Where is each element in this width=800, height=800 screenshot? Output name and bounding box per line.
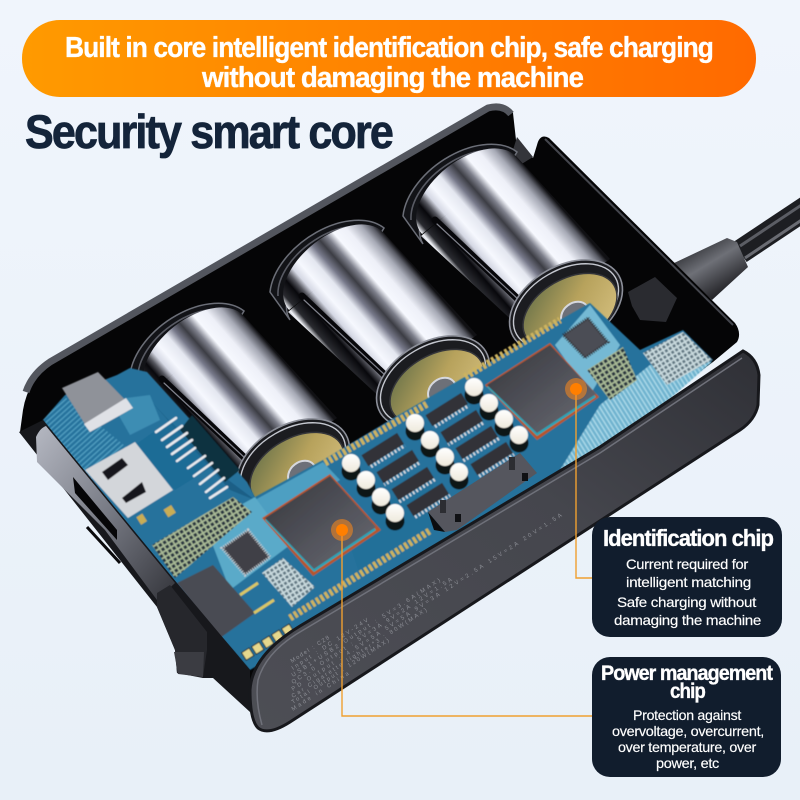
lid spec text: Input : DC 12V-24V	[291, 618, 370, 672]
marker dot: identification chip	[565, 378, 587, 400]
lid spec text: Made in China	[291, 671, 351, 713]
micro USB connector	[62, 372, 133, 432]
small QFP chips	[222, 318, 608, 575]
card: power management chip: Protection against	[633, 707, 741, 723]
device shell with black interior	[20, 104, 739, 705]
front panel with USB ports	[19, 420, 250, 712]
card: identification chip: Identification chip	[603, 525, 774, 551]
power cable	[672, 186, 800, 300]
silver shield with slots	[85, 442, 176, 525]
lid spec text: PD Output : 4.5V=5A 5V=5A 9V=3A 12V=2.5A 15V=2A 20V=1.5A	[291, 513, 563, 693]
banner: orange pill headline	[22, 20, 756, 97]
card: identification chip: intelligent matching	[626, 574, 751, 590]
marker dot: power management chip	[331, 519, 353, 541]
top lid	[250, 351, 759, 731]
internal cable connector	[628, 277, 677, 322]
logic chips	[361, 393, 515, 519]
pad grids	[152, 332, 712, 607]
banner: orange pill headline: Built in core intelligent identification chip, safe charging	[65, 32, 713, 64]
metal socket cylinder: right	[403, 144, 639, 371]
lid spec text: Car Cigarette lighter*3 : 80W(MAX)	[291, 607, 428, 700]
identification chip	[485, 343, 599, 440]
callout line: identification chip	[576, 389, 594, 578]
power management chip	[262, 474, 381, 576]
title: Security smart core	[25, 105, 393, 158]
card: power management chip: Power management	[601, 662, 773, 685]
solder pads	[241, 624, 294, 660]
lid connector lip	[428, 453, 537, 532]
dark connector block	[177, 565, 274, 638]
lid spec text: USB1+USB2 Output : 5V=3.6A(MAX)	[291, 578, 442, 679]
card: power management chip: over temperature, over	[618, 739, 757, 755]
lid spec text: Total Output : 120W(MAX)	[291, 638, 391, 706]
card: identification chip: damaging the machine	[614, 612, 762, 628]
metal socket cylinder: middle	[270, 220, 506, 447]
gold pin strips	[290, 320, 560, 618]
banner: orange pill headline: without damaging the machine	[201, 62, 584, 94]
circuit board	[43, 303, 713, 670]
lid spec text: Model : C28	[290, 635, 331, 665]
metal socket cylinder: left	[130, 303, 366, 530]
card: power management chip: power, etc	[656, 755, 719, 771]
callout line: power management chip	[342, 530, 594, 716]
card: identification chip: Current required for	[626, 556, 749, 572]
card: power management chip	[592, 657, 781, 777]
card: power management chip: overvoltage, overcurrent,	[612, 723, 764, 739]
card: identification chip	[592, 517, 782, 637]
card: power management chip: chip	[670, 680, 705, 703]
inductor coils	[156, 418, 227, 498]
card: identification chip: Safe charging without	[617, 594, 756, 610]
capacitors	[342, 378, 528, 530]
lid spec text: QC3.0 Output : 5V=3A 9V=2A 12V=1.5A	[291, 577, 454, 686]
